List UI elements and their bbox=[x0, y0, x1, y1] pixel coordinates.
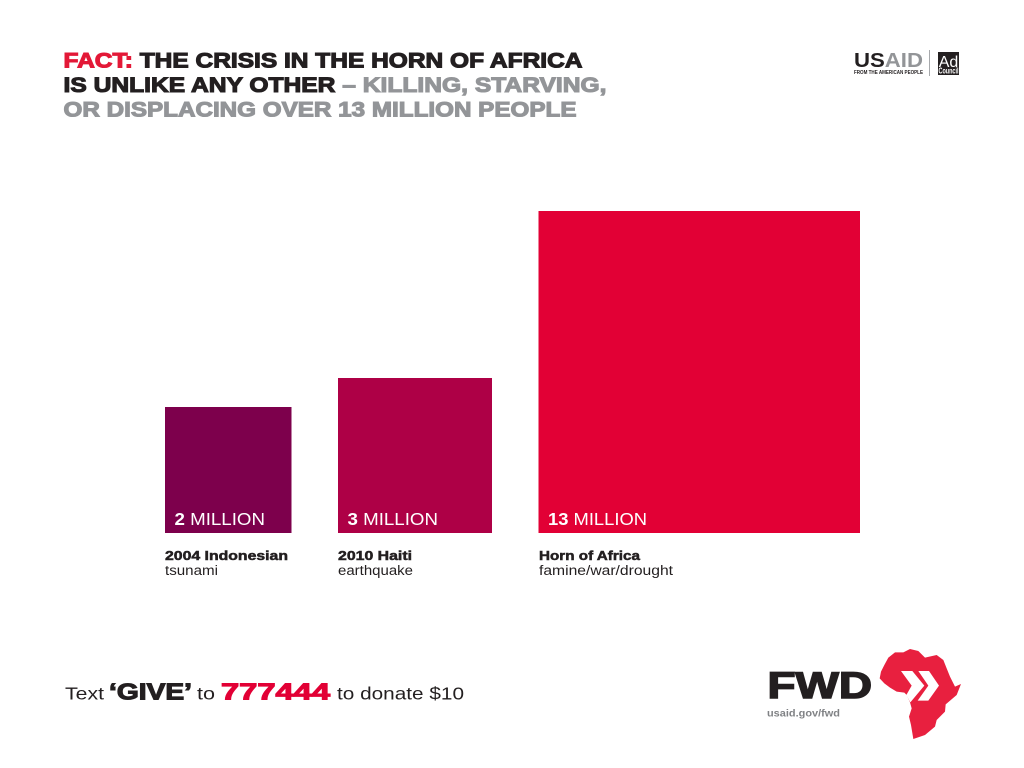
label: Horn of Africa famine/war/drought: famine/war/drought bbox=[539, 563, 673, 578]
logo: FWD: usaid.gov/fwd bbox=[767, 708, 840, 720]
logo: USAID and Ad Council: USAID bbox=[854, 50, 923, 72]
bar: Horn of Africa, 13 million bbox=[538, 211, 860, 533]
title: OR DISPLACING OVER 13 MILLION PEOPLE bbox=[64, 98, 576, 122]
call to action: to donate $10 bbox=[337, 684, 464, 704]
call to action bbox=[65, 678, 464, 704]
label: 2004 Indonesian tsunami: tsunami bbox=[165, 563, 218, 578]
bar: 2010 Haiti earthquake, 3 million: 3 MILLION bbox=[348, 509, 438, 529]
bar: 2004 Indonesian tsunami, 2 million bbox=[165, 407, 292, 533]
label: 2004 Indonesian tsunami: 2004 Indonesian bbox=[165, 548, 288, 563]
title: IS UNLIKE ANY OTHER – KILLING, STARVING, bbox=[64, 73, 606, 97]
call to action: 777444 bbox=[221, 678, 330, 704]
call to action: to bbox=[197, 684, 215, 704]
bar: 2010 Haiti earthquake, 3 million bbox=[338, 378, 492, 533]
label: 2004 Indonesian tsunami bbox=[165, 548, 288, 578]
title: FACT: THE CRISIS IN THE HORN OF AFRICA bbox=[64, 48, 582, 72]
logo: USAID and Ad Council: FROM THE AMERICAN PEOPLE bbox=[854, 70, 924, 76]
label: 2010 Haiti earthquake: 2010 Haiti bbox=[338, 548, 412, 563]
call to action: ‘GIVE’ bbox=[109, 678, 192, 704]
call to action: Text bbox=[65, 684, 104, 704]
logo: FWD bbox=[767, 665, 872, 720]
label: Horn of Africa famine/war/drought: Horn of Africa bbox=[539, 548, 641, 563]
title bbox=[64, 48, 606, 122]
logo: USAID and Ad Council: Ad bbox=[939, 54, 958, 71]
logo: USAID and Ad Council: Council bbox=[938, 66, 958, 76]
logo: USAID and Ad Council bbox=[854, 50, 959, 76]
icon: Africa with chevrons bbox=[880, 649, 961, 739]
label: 2010 Haiti earthquake: earthquake bbox=[338, 563, 413, 578]
label: Horn of Africa famine/war/drought bbox=[539, 548, 673, 578]
logo: FWD: FWD bbox=[768, 665, 872, 706]
label: 2010 Haiti earthquake bbox=[338, 548, 413, 578]
bar: 2004 Indonesian tsunami, 2 million: 2 MILLION bbox=[174, 509, 265, 529]
bar: Horn of Africa, 13 million: 13 MILLION bbox=[548, 509, 647, 529]
